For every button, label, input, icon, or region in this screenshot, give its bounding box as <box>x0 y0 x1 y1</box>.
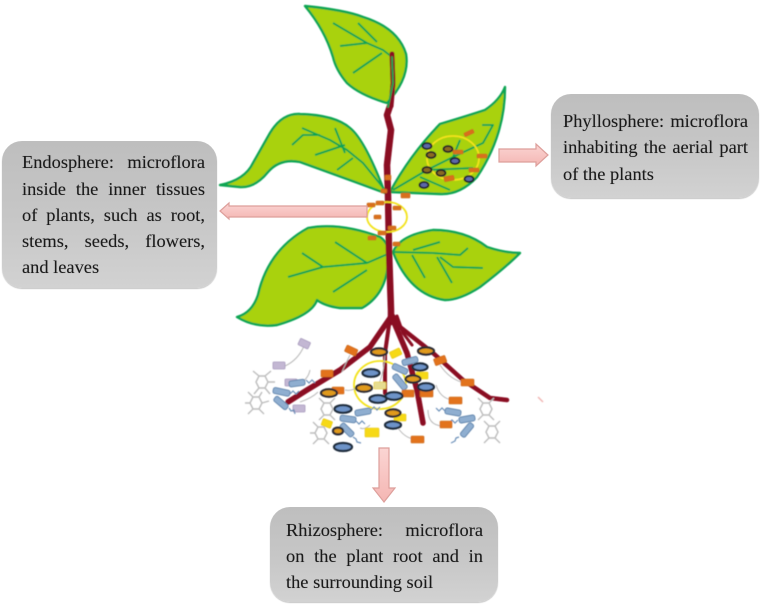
connector threads <box>285 346 465 439</box>
rhizosphere line 3: the surrounding soil <box>286 572 433 592</box>
dark-ringed orange cells <box>321 347 434 434</box>
arrow: to rhizosphere <box>373 448 395 502</box>
leaf: top <box>305 6 407 103</box>
phyllosphere line 2: inhabiting the aerial part <box>563 137 748 157</box>
dark-ringed blue cells <box>334 363 434 451</box>
leaf: lower right <box>393 230 520 300</box>
pink fragment <box>538 397 543 402</box>
yellow circles <box>354 136 479 409</box>
dark cells <box>420 143 474 188</box>
rhizosphere microflora <box>245 338 500 451</box>
arrow: to endosphere <box>220 203 367 219</box>
yellow cells <box>321 348 428 437</box>
rhizosphere line 1: Rhizosphere: microflora <box>286 520 483 540</box>
callout: rhizosphere <box>270 507 498 602</box>
leaf: upper left <box>220 114 385 193</box>
stem and roots <box>288 54 507 423</box>
wavy flagella <box>289 380 459 443</box>
endosphere line 3: of plants, such as root, <box>22 205 205 225</box>
rhizosphere line 2: on the plant root and in <box>286 546 483 566</box>
leaf: lower left <box>237 226 390 326</box>
blue rods <box>273 356 475 438</box>
molecules <box>245 371 500 444</box>
leaf: upper right with microflora <box>390 87 505 194</box>
endosphere line 2: inside the inner tissues <box>22 179 205 199</box>
callout: phyllosphere <box>551 94 759 198</box>
endosphere line 5: and leaves <box>22 257 99 277</box>
endosphere line 4: stems, seeds, flowers, <box>22 231 205 251</box>
phyllosphere line 3: of the plants <box>563 164 654 184</box>
lavender cells <box>273 338 311 412</box>
endosphere line 1: Endosphere: microflora <box>22 152 205 172</box>
callout: endosphere <box>2 141 217 288</box>
arrow: to phyllosphere <box>499 144 548 166</box>
orange cells <box>321 345 474 443</box>
orange cells <box>367 129 487 246</box>
microflora on leaf and stem <box>354 129 487 409</box>
phyllosphere line 1: Phyllosphere: microflora <box>563 111 748 131</box>
